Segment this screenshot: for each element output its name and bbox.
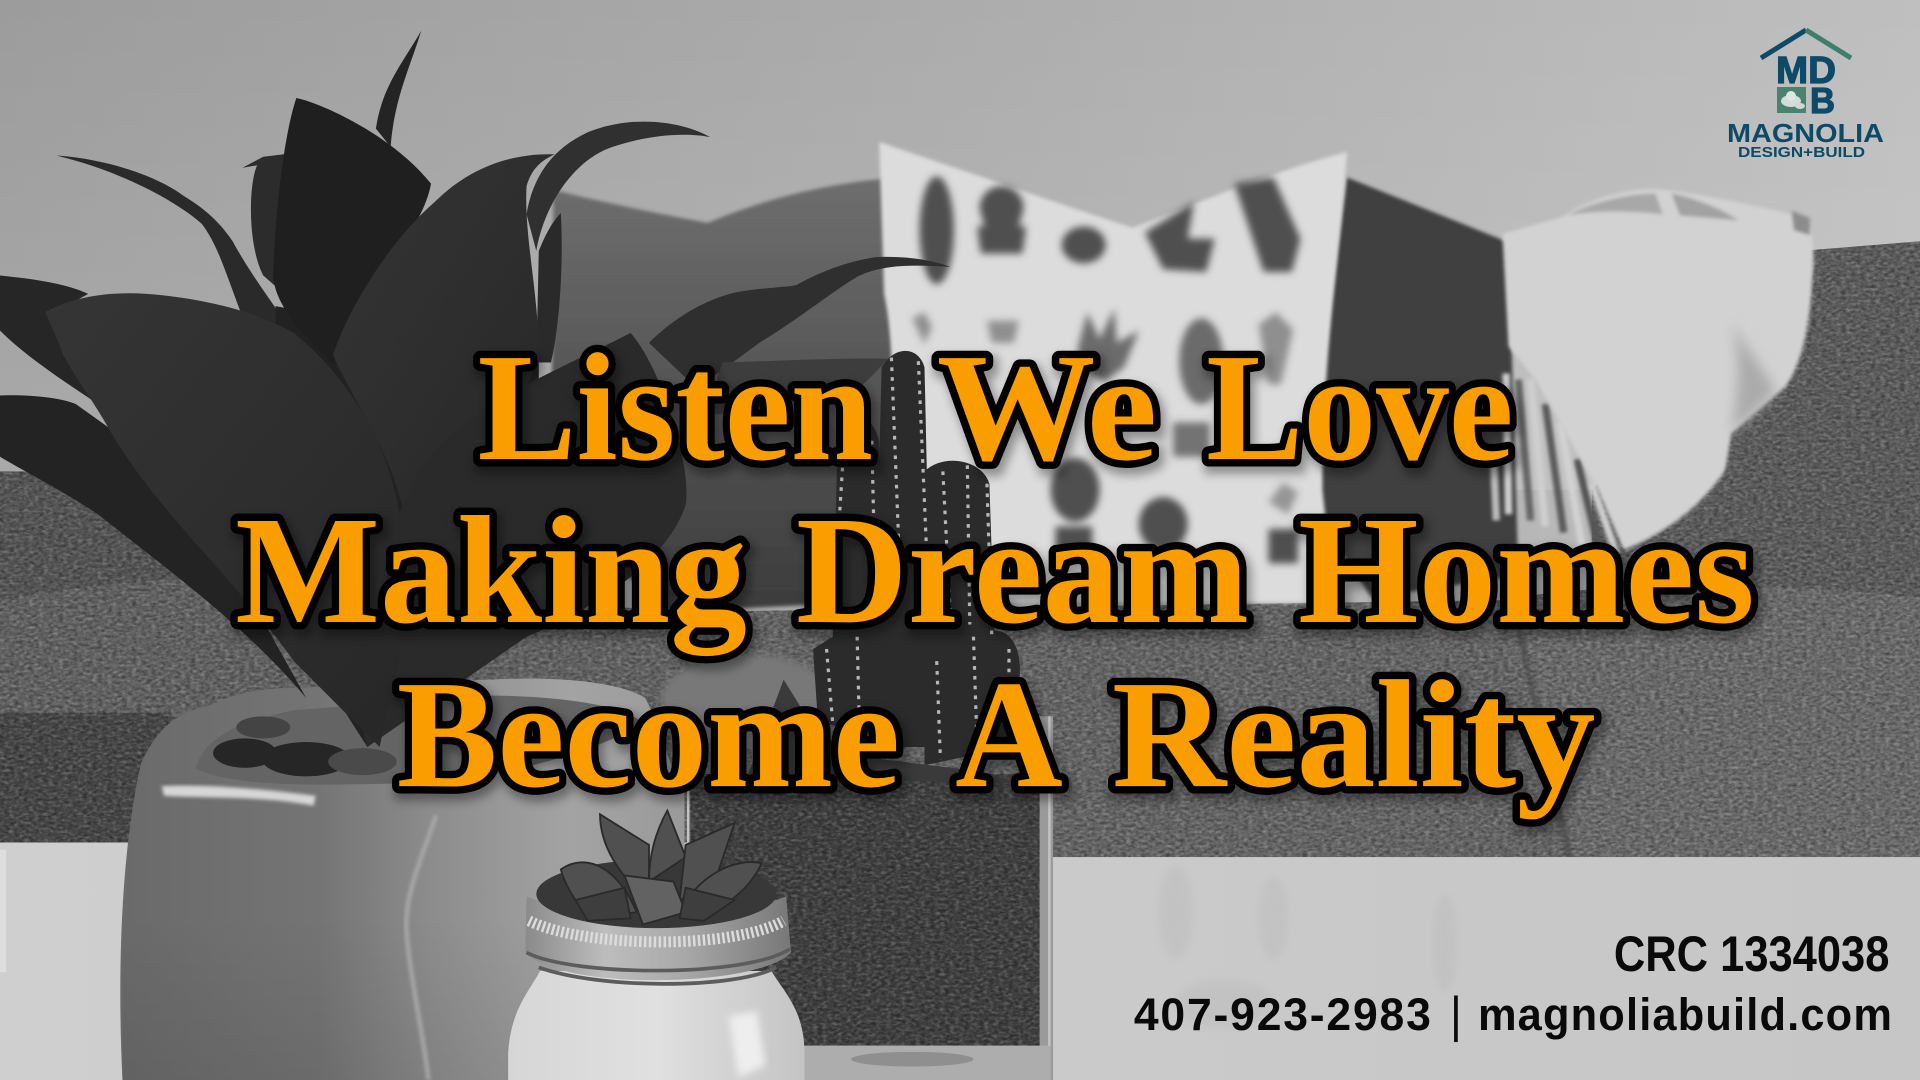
headline line 3: A bbox=[955, 650, 1063, 820]
headline shadow: Become bbox=[400, 656, 904, 826]
headline shadow bbox=[239, 329, 1758, 826]
headline shadow: Reality bbox=[1116, 656, 1599, 826]
pot streak bbox=[406, 816, 436, 1080]
headline shadow: A bbox=[959, 656, 1067, 826]
headline line 2: Making bbox=[235, 486, 747, 656]
logo monogram: B bbox=[1810, 80, 1835, 121]
low right leaf bbox=[704, 359, 888, 416]
headline line 1 bbox=[478, 323, 1513, 493]
headline line 1: Listen bbox=[478, 323, 873, 493]
sofa front left bbox=[0, 713, 171, 845]
blanket bbox=[1502, 189, 1814, 550]
headline line 1: Love bbox=[1206, 323, 1513, 493]
headline shadow: Dream bbox=[800, 492, 1253, 662]
headline shadow: Making bbox=[239, 492, 751, 662]
jar body bbox=[508, 971, 804, 1080]
headline line 3 bbox=[397, 650, 1596, 820]
headline line 2: Homes bbox=[1298, 486, 1755, 656]
cactus body bbox=[747, 351, 1022, 784]
jar soil bbox=[536, 860, 776, 928]
blurred sofa bbox=[0, 142, 1920, 857]
cactus pillow bbox=[879, 142, 1347, 602]
headline shadow: We bbox=[940, 329, 1161, 499]
lid ribbing bbox=[529, 921, 784, 942]
phone number: 407-923-2983 bbox=[1134, 989, 1433, 1040]
logo monogram: MD bbox=[1776, 50, 1836, 92]
blurred round shape behind plants bbox=[661, 654, 833, 747]
logo tagline: DESIGN+BUILD bbox=[1738, 144, 1865, 161]
logo monogram bbox=[1776, 50, 1836, 121]
jar highlight bbox=[729, 1011, 765, 1078]
vase base bbox=[802, 1046, 1051, 1080]
headline shadow: Love bbox=[1210, 329, 1517, 499]
headline bbox=[235, 323, 1758, 826]
blanket fringe bbox=[1494, 373, 1616, 553]
right middle leaf bbox=[333, 154, 555, 514]
logo bbox=[1727, 30, 1884, 161]
table bbox=[0, 842, 1920, 1080]
cactus in glass vase bbox=[688, 351, 1053, 1080]
succulent bbox=[561, 811, 762, 924]
cactus spines bbox=[827, 358, 1009, 759]
contact details bbox=[1134, 926, 1893, 1042]
dark pillow right bbox=[1316, 178, 1518, 598]
curved leaf bbox=[527, 122, 710, 251]
small back leaf bbox=[242, 154, 284, 294]
pot highlight bbox=[162, 786, 316, 806]
stem behind leaves bbox=[536, 213, 562, 362]
dark plant core bbox=[276, 306, 539, 747]
left pillow bbox=[551, 179, 906, 612]
sofa back right bbox=[1592, 241, 1920, 606]
big left leaf bbox=[45, 293, 405, 747]
vase glass edge bbox=[1040, 716, 1053, 1080]
headline shadow: Listen bbox=[481, 329, 877, 499]
headline line 1: We bbox=[937, 323, 1157, 493]
jar lid bbox=[525, 896, 791, 980]
logo name: MAGNOLIA bbox=[1727, 118, 1884, 148]
headline line 2 bbox=[235, 486, 1755, 656]
pebbles bbox=[213, 716, 397, 776]
central leaf bbox=[273, 98, 431, 365]
left thin leaf bbox=[56, 156, 289, 328]
ceramic pot bbox=[120, 678, 684, 1080]
sofa seat left bbox=[0, 578, 686, 857]
succulent jar bbox=[508, 811, 804, 1080]
back spike leaf bbox=[376, 31, 421, 147]
separator bar bbox=[1454, 996, 1458, 1042]
logo magnolia square bbox=[1777, 87, 1806, 113]
website: magnoliabuild.com bbox=[1478, 989, 1893, 1040]
headline line 3: Become bbox=[397, 650, 900, 820]
pot inner rim bbox=[196, 696, 642, 785]
headline shadow: Homes bbox=[1302, 492, 1758, 662]
long right leaf bbox=[649, 257, 950, 389]
far left upper leaf bbox=[0, 276, 98, 404]
vase glass lines bbox=[688, 716, 1049, 1080]
sofa cushion seam bbox=[1512, 600, 1570, 857]
lid lower rim bbox=[527, 949, 790, 984]
table reflections bbox=[1158, 866, 1457, 1029]
sofa centre cushion bbox=[661, 600, 1573, 857]
pillow cactus pattern bbox=[912, 176, 1300, 563]
far left lower leaf bbox=[0, 395, 306, 698]
sand in vase bbox=[691, 774, 1041, 1046]
background wall bbox=[0, 0, 1920, 857]
headline line 3: Reality bbox=[1112, 650, 1596, 820]
dark plant leaves bbox=[0, 31, 950, 747]
sofa back left bbox=[0, 471, 245, 606]
front round leaf bbox=[360, 333, 687, 747]
headline line 2: Dream bbox=[796, 486, 1249, 656]
sofa right cushion bbox=[1500, 586, 1920, 857]
logo roof bbox=[1761, 30, 1851, 58]
